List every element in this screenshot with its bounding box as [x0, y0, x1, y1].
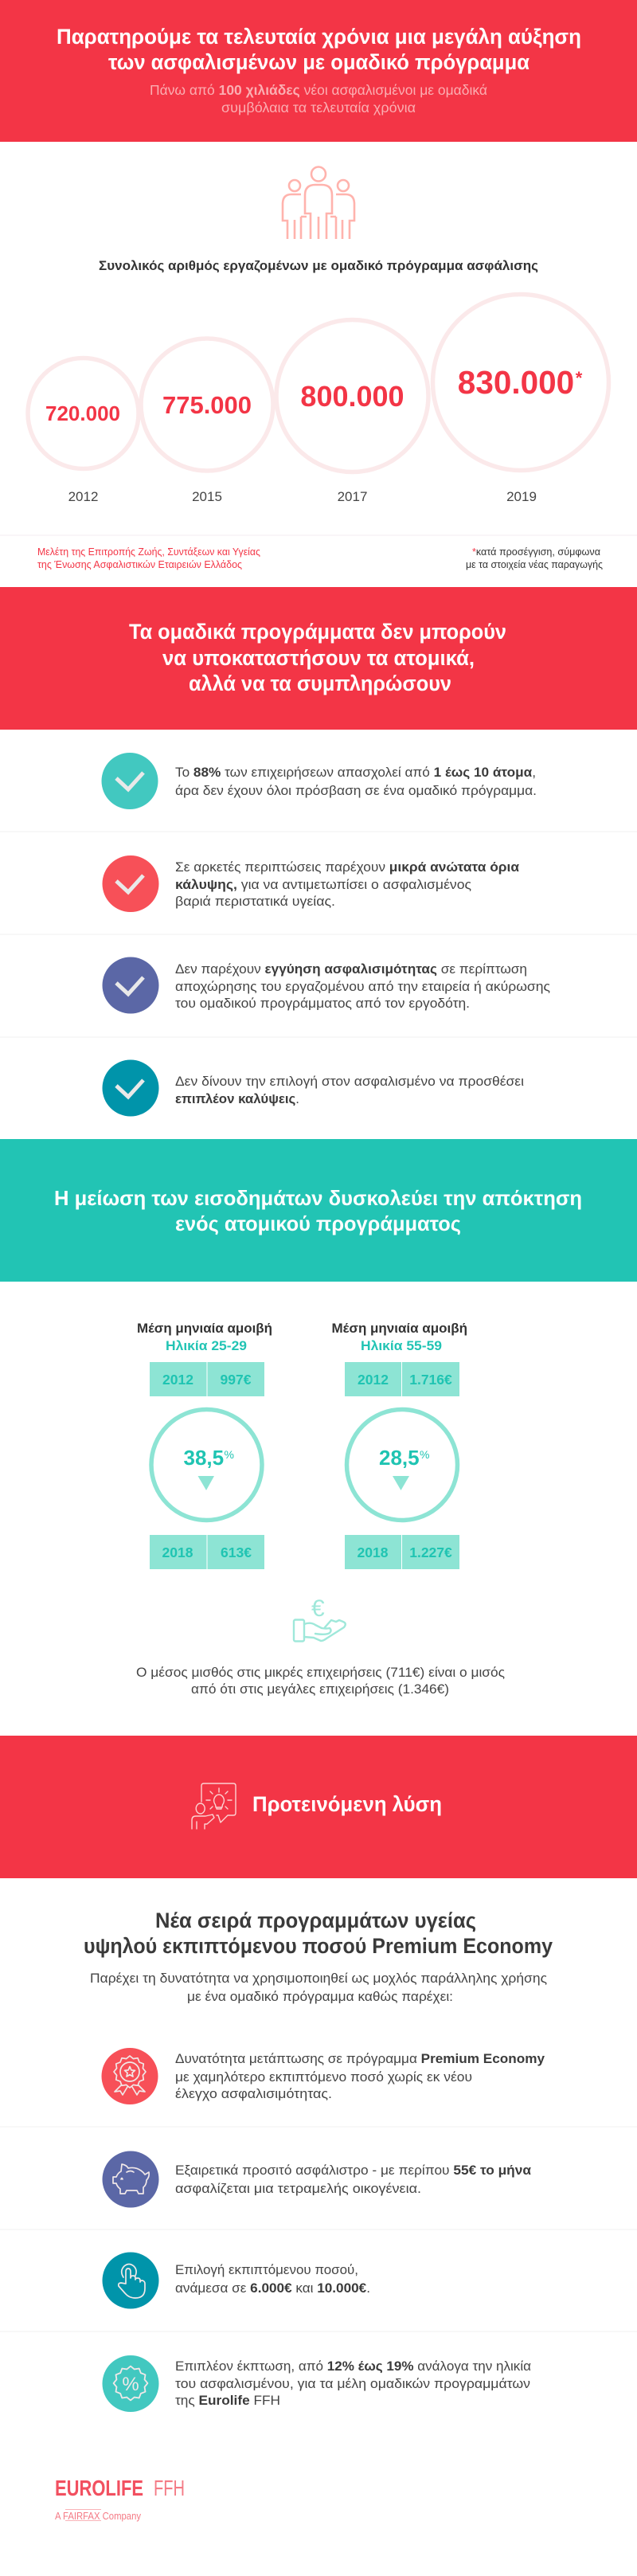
list item: switch to premium economy [102, 2048, 545, 2104]
text: του ασφαλισμένου, για τα μέλη ομαδικών προγραμμάτων [175, 2377, 530, 2391]
heading: Προτεινόμενη λύση [252, 1792, 442, 1816]
list item: 88% of companies [102, 753, 537, 809]
column heading: Ηλικία 25-29 [166, 1339, 247, 1353]
text: του ομαδικού προγράμματος από τον εργοδότη. [175, 996, 470, 1011]
text [175, 2359, 531, 2408]
logo: Eurolife FFH [55, 2476, 185, 2522]
ring: 38,5% decrease: 38,5 [183, 1446, 224, 1470]
panel: proposed solution header [0, 1736, 637, 1878]
heading: new programme series [84, 1909, 553, 1958]
icon: dark teal check [102, 1059, 159, 1117]
ring: 28,5% decrease: 28,5 [379, 1446, 420, 1470]
text: βαριά περιστατικά υγείας. [175, 895, 335, 909]
text: salary comparison [136, 1666, 505, 1697]
title [57, 25, 581, 74]
table 2018: 2018 [162, 1544, 193, 1560]
table 2012 [150, 1362, 264, 1396]
footnote [466, 546, 603, 570]
text: άρα δεν έχουν όλοι πρόσβαση σε ένα ομαδικό πρόγραμμα. [175, 784, 537, 798]
panel: second header: να υποκαταστήσουν τα ατομικά, [162, 646, 475, 670]
panel: teal header: ενός ατομικού προγράμματος [175, 1212, 461, 1235]
heading: new programme series: υψηλού εκπιπτόμενου ποσού Premium Economy [84, 1934, 553, 1958]
text [175, 765, 537, 798]
text: αποχώρησης του εργαζομένου από την εταιρεία ή ακύρωσης [175, 980, 550, 994]
list item: affordable premium [102, 2151, 531, 2208]
chart: bubble 2019: 2019 [506, 489, 537, 504]
text: salary comparison: Ο μέσος μισθός στις μικρές επιχειρήσεις (711€) είναι ο μισός [136, 1666, 505, 1680]
heading: new programme series: Νέα σειρά προγραμμάτων υγείας [155, 1909, 476, 1932]
text [175, 962, 550, 1011]
text: κάλυψης, για να αντιμετωπίσει ο ασφαλισμένος [175, 878, 471, 892]
text [175, 860, 519, 909]
text: Εξαιρετικά προσιτό ασφάλιστρο - με περίπου 55€ το μήνα [175, 2163, 531, 2178]
icon: percent badge [102, 2355, 159, 2412]
chart: bubble 2017 [276, 320, 428, 504]
table 2018: 1.227€ [409, 1544, 452, 1560]
panel: teal header [0, 1139, 637, 1282]
list item: extra discount [102, 2355, 531, 2412]
table 2018 [150, 1535, 264, 1569]
list item: low coverage limits [102, 855, 519, 912]
footnote: με τα στοιχεία νέας παραγωγής [466, 559, 603, 570]
table 2012: 997€ [221, 1372, 252, 1388]
title: των ασφαλισμένων με ομαδικό πρόγραμμα [108, 50, 530, 74]
text [175, 2163, 531, 2196]
text: intro: με ένα ομαδικό πρόγραμμα καθώς παρέχει: [187, 1990, 453, 2004]
table 2012: 1.716€ [409, 1372, 452, 1388]
text: Επιλογή εκπιπτόμενου ποσού, [175, 2263, 358, 2277]
text [175, 1075, 524, 1106]
table 2018: 2018 [358, 1544, 389, 1560]
text: ανάμεσα σε 6.000€ και 10.000€. [175, 2281, 370, 2296]
ring: 28,5% decrease: % [420, 1448, 429, 1461]
panel: second header [0, 587, 637, 730]
text: intro: Παρέχει τη δυνατότητα να χρησιμοποιηθεί ως μοχλός παράλληλης χρήσης [90, 1971, 547, 1986]
column: age 55-59 [331, 1321, 467, 1569]
chart: bubble 2015: 775.000 [162, 391, 252, 419]
ring: 38,5% decrease [151, 1410, 262, 1520]
text: Δεν παρέχουν εγγύηση ασφαλισιμότητας σε περίπτωση [175, 962, 527, 977]
chart: bubble 2019: * [576, 368, 583, 388]
ring: 28,5% decrease [347, 1410, 457, 1520]
subtitle [150, 82, 487, 115]
source note [37, 546, 260, 570]
panel: second header: αλλά να τα συμπληρώσουν [189, 671, 451, 695]
text: με χαμηλότερο εκπιπτόμενο ποσό χωρίς εκ νέου [175, 2070, 472, 2085]
text: Σε αρκετές περιπτώσεις παρέχουν μικρά ανώτατα όρια [175, 860, 519, 875]
text: Το 88% των επιχειρήσεων απασχολεί από 1 έως 10 άτομα , [175, 765, 536, 780]
icon: percent badge: % [122, 2374, 139, 2395]
panel: teal header: Η μείωση των εισοδημάτων δυσκολεύει την απόκτηση [54, 1186, 582, 1210]
list item: deductible choice [102, 2253, 370, 2308]
column heading: Μέση μηνιαία αμοιβή [331, 1321, 467, 1336]
column: age 25-29 [137, 1321, 272, 1569]
column heading [137, 1321, 272, 1353]
source note: Μελέτη της Επιτροπής Ζωής, Συντάξεων και Υγείας [37, 546, 260, 558]
column heading: Ηλικία 55-59 [361, 1339, 442, 1353]
icon: red check [102, 855, 159, 912]
chart: bubble 2012: 720.000 [45, 401, 120, 425]
chart: bubble 2017: 2017 [338, 489, 367, 504]
table 2018 [345, 1535, 459, 1569]
text: ασφαλίζεται μια τετραμελής οικογένεια. [175, 2182, 421, 2196]
icon: hand with euro [294, 1595, 346, 1641]
chart: bubble 2015: 2015 [192, 489, 222, 504]
panel: second header: Τα ομαδικά προγράμματα δεν μπορούν [129, 620, 506, 644]
footnote: *κατά προσέγγιση, σύμφωνα [472, 546, 600, 558]
text: Δεν δίνουν την επιλογή στον ασφαλισμένο να προσθέσει [175, 1075, 524, 1089]
list item: no insurability guarantee [102, 957, 550, 1013]
chart: bubble 2019: 830.000 [458, 364, 574, 401]
table 2012: 2012 [358, 1372, 389, 1388]
text: intro [90, 1971, 547, 2004]
source note: της Ένωσης Ασφαλιστικών Εταιρειών Ελλάδος [37, 559, 242, 570]
title: Παρατηρούμε τα τελευταία χρόνια μια μεγάλη αύξηση [57, 25, 581, 49]
icon: people group [283, 167, 354, 239]
icon: presenter with idea [192, 1783, 236, 1829]
ring: 38,5% decrease: % [225, 1448, 234, 1461]
text: έλεγχο ασφαλισιμότητας. [175, 2087, 332, 2101]
icon: teal check [102, 753, 158, 809]
column heading [331, 1321, 467, 1353]
icon: blue check [102, 957, 159, 1013]
chart: bubble 2019 [433, 295, 608, 504]
icon: award badge [102, 2048, 158, 2104]
table 2018: 613€ [221, 1544, 252, 1560]
text: salary comparison: από ότι στις μεγάλες επιχειρήσεις (1.346€) [191, 1682, 449, 1697]
chart heading: Συνολικός αριθμός εργαζομένων με ομαδικό πρόγραμμα ασφάλισης [99, 259, 538, 273]
table 2012 [345, 1362, 459, 1396]
text: Δυνατότητα μετάπτωσης σε πρόγραμμα Premium Economy [175, 2052, 545, 2066]
chart: bubble 2012: 2012 [68, 489, 98, 504]
table 2012: 2012 [162, 1372, 193, 1388]
icon: pointing hand [102, 2253, 159, 2308]
text: Επιπλέον έκπτωση, από 12% έως 19% ανάλογα την ηλικία [175, 2359, 531, 2374]
panel: top header [0, 0, 637, 142]
text [175, 2263, 370, 2296]
chart: bubble 2017: 800.000 [300, 380, 404, 413]
logo: Eurolife FFH: A FAIRFAX Company [55, 2510, 141, 2522]
text: της Eurolife FFH [175, 2394, 280, 2408]
column heading: Μέση μηνιαία αμοιβή [137, 1321, 272, 1336]
text: επιπλέον καλύψεις. [175, 1092, 299, 1106]
logo: Eurolife FFH: FFH [154, 2476, 185, 2500]
text [175, 2052, 545, 2101]
subtitle: συμβόλαια τα τελευταία χρόνια [221, 100, 416, 115]
chart: bubble 2015 [141, 339, 273, 504]
list item: no extra coverage [102, 1059, 524, 1117]
icon: piggy bank [102, 2151, 159, 2208]
logo: Eurolife FFH: EUROLIFE [55, 2476, 143, 2500]
subtitle: Πάνω από 100 χιλιάδες νέοι ασφαλισμένοι με ομαδικά [150, 82, 487, 98]
icon: hand with euro: € [311, 1595, 325, 1622]
chart: bubble 2012 [28, 358, 139, 504]
